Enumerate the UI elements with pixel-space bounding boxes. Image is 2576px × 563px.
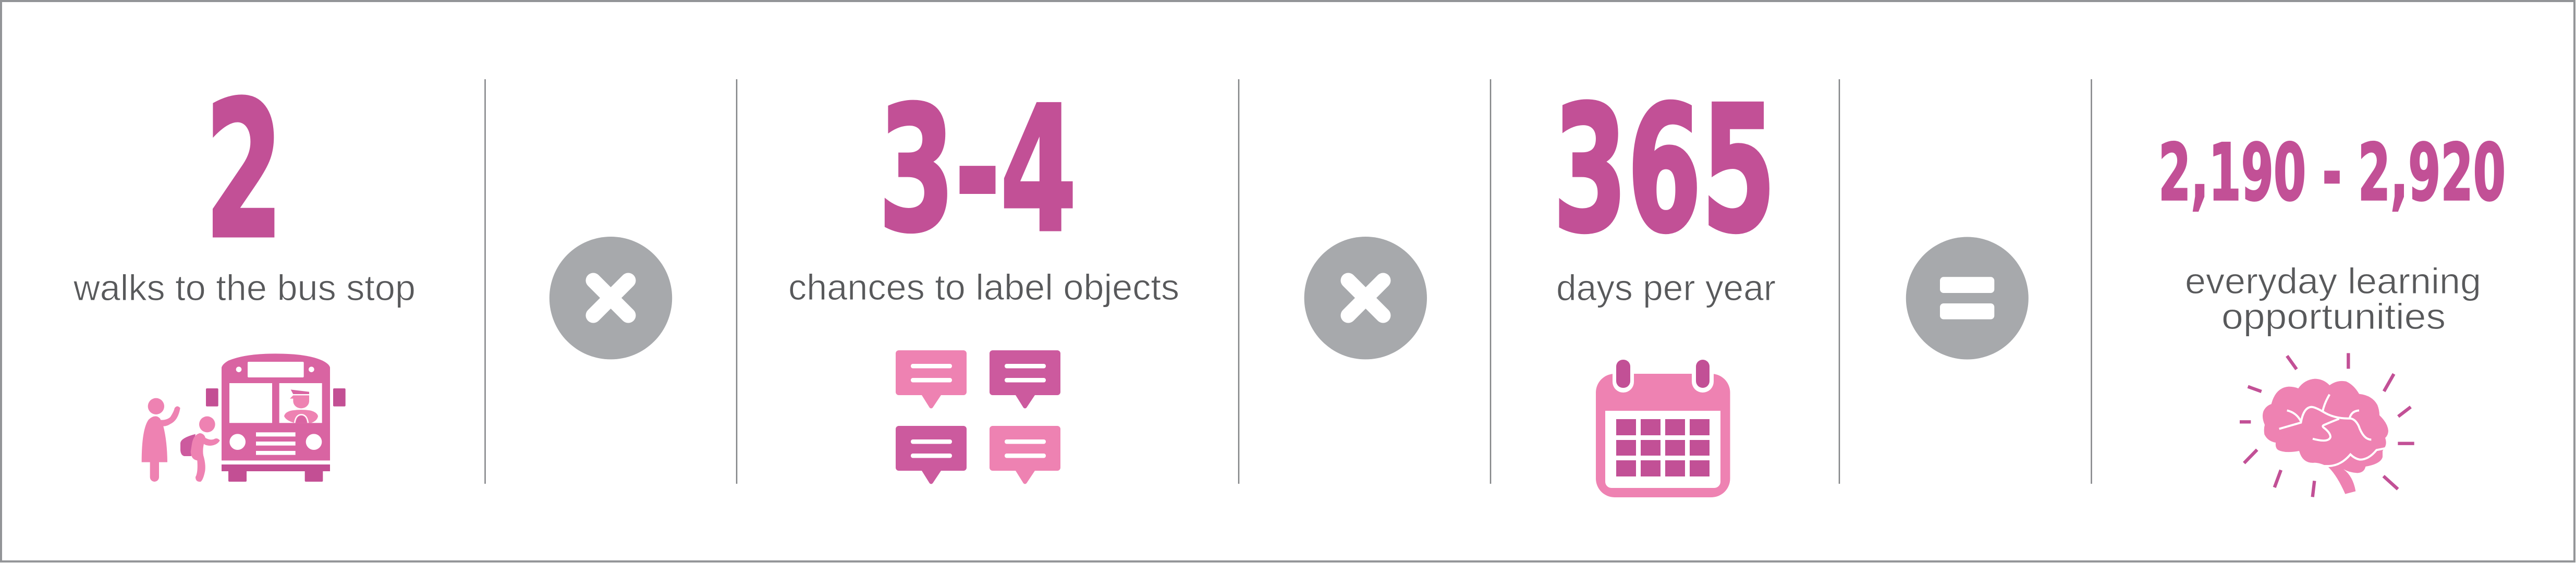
caption: everyday learning opportunities	[2185, 261, 2481, 337]
caption: chances to label objects: chances to label objects	[788, 267, 1179, 308]
icon: calendar	[1596, 354, 1730, 497]
operator: multiply	[550, 237, 672, 359]
operator: multiply	[1304, 237, 1427, 359]
caption: everyday learning opportunities: opportunities	[2221, 296, 2446, 337]
panel: days per year	[1553, 69, 1776, 497]
number: 3-4: 3-4	[878, 70, 1077, 270]
panel: everyday learning opportunities	[2158, 128, 2506, 497]
caption: days per year: days per year	[1556, 267, 1776, 308]
number: 365: 365	[1553, 69, 1776, 271]
panel: chances to label objects	[788, 70, 1179, 484]
number: 2: 2	[205, 62, 283, 280]
panel: walks to the bus stop	[73, 62, 416, 482]
operator: equals	[1906, 237, 2029, 360]
caption: walks to the bus stop: walks to the bus stop	[73, 267, 416, 308]
caption: everyday learning opportunities: everyday learning	[2185, 261, 2481, 301]
icon: brain with rays	[2240, 353, 2414, 497]
icon: school bus with parent and child	[142, 353, 346, 482]
icon: speech bubbles	[896, 350, 1060, 484]
